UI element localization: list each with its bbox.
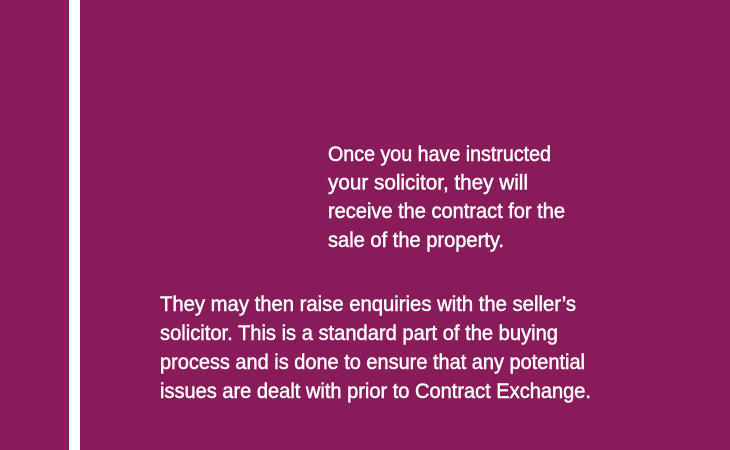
- text block: instructing your solicitor: sale of the property.: [328, 229, 504, 252]
- text block: raising enquiries: They may then raise enquiries with the seller’s: [160, 293, 576, 316]
- text block: raising enquiries: issues are dealt with prior to Contract Exchange.: [160, 380, 591, 403]
- text block: instructing your solicitor: Once you have instructed: [328, 143, 551, 166]
- text block: raising enquiries: [160, 293, 591, 403]
- text block: raising enquiries: solicitor. This is a standard part of the buying: [160, 322, 558, 345]
- text block: raising enquiries: process and is done to ensure that any potential: [160, 351, 585, 374]
- text block: instructing your solicitor: [328, 143, 565, 252]
- text block: instructing your solicitor: your solicitor, they will: [328, 172, 528, 194]
- vertical white timeline bar: [69, 0, 80, 450]
- text block: instructing your solicitor: receive the contract for the: [328, 200, 565, 223]
